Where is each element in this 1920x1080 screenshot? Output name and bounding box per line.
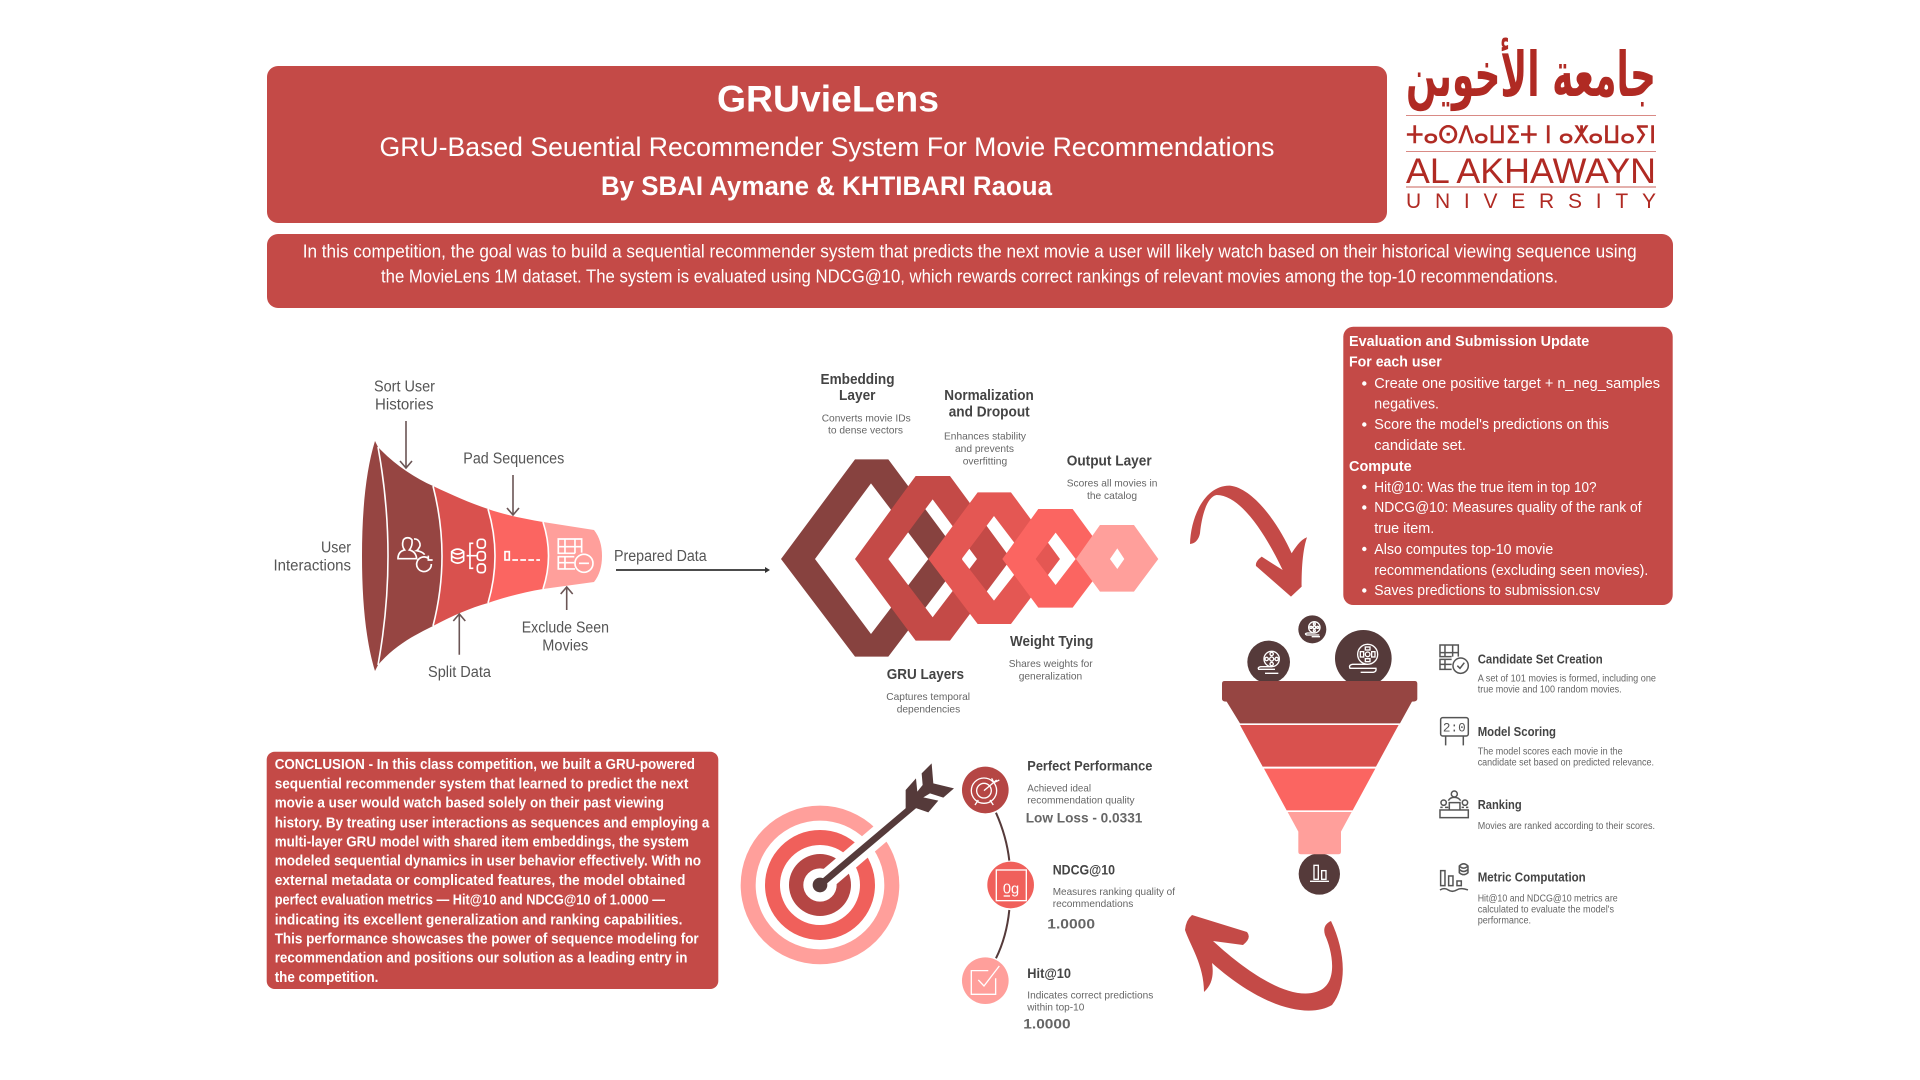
step: candidate set creation: Candidate Set Creation: [1478, 652, 1603, 666]
step: model scoring: Model Scoring: [1478, 725, 1556, 739]
text: normalization and dropout: Enhances stability: [944, 431, 1027, 443]
text: weight tying: generalization: [1019, 670, 1082, 682]
title banner: [267, 66, 1387, 223]
panel: evaluation and submission: Score the model's predictions on this: [1374, 417, 1609, 433]
label: pad sequences: [463, 450, 565, 515]
text: embedding layer: Embedding: [820, 372, 894, 388]
text: output layer: Output Layer: [1067, 454, 1152, 470]
description panel: In this competition, the goal was to build a sequential recommender system that predicts the next movie a user will likely watch based on their historical viewing sequence using: [303, 242, 1637, 262]
label: sort user histories: [374, 379, 435, 468]
panel: conclusion: movie a user would watch based solely on their past viewing: [275, 795, 664, 811]
panel: evaluation and submission: negatives.: [1374, 396, 1439, 412]
movie reels: [1247, 615, 1392, 687]
label: user interactions: [274, 539, 351, 574]
metric: perfect performance: Perfect Performance: [1027, 758, 1152, 774]
step: model scoring: The model scores each movie in the: [1478, 747, 1623, 758]
icon: NDCG badge: [987, 862, 1034, 908]
label: exclude seen movies: Movies: [542, 638, 589, 655]
weight tying ring: [1002, 509, 1109, 608]
arrow: prepared data: Prepared Data: [614, 548, 707, 565]
output circle: [1299, 853, 1340, 895]
step: metric computation: [1440, 864, 1618, 927]
icon: users refresh: [398, 538, 433, 572]
panel: evaluation and submission: Compute: [1349, 459, 1412, 475]
icon: bars: [1310, 865, 1329, 881]
panel: conclusion: This performance showcases the power of sequence modeling for: [275, 931, 699, 947]
metric: NDCG@10: Measures ranking quality of: [1053, 886, 1175, 898]
icon: podium: [1440, 791, 1468, 818]
panel: evaluation and submission: Saves predictions to submission.csv: [1374, 583, 1601, 599]
university logo: [1406, 37, 1656, 213]
evaluation funnel: [1222, 615, 1417, 895]
text: output layer: [1067, 454, 1158, 502]
arrow: curved back to metrics: [1185, 915, 1343, 1011]
label: sort user histories: Sort User: [374, 379, 435, 396]
metric: NDCG@10: NDCG@10: [1053, 861, 1115, 877]
stage 4: [1288, 812, 1352, 854]
label: split data: Split Data: [428, 664, 491, 681]
text: normalization and dropout: Normalization: [944, 388, 1034, 404]
step: candidate set creation: [1440, 645, 1656, 696]
text: normalization and dropout: and Dropout: [949, 405, 1030, 421]
description panel: the MovieLens 1M dataset. The system is evaluated using NDCG@10, which rewards correct rankings of relevant movies among the top-10 recommendations.: [381, 267, 1558, 287]
icon: scoreboard: [1441, 718, 1468, 745]
segment: second stage: [433, 486, 495, 626]
text: weight tying: Weight Tying: [1010, 634, 1093, 650]
segment: third stage: [488, 509, 548, 603]
text: embedding layer: Converts movie IDs: [822, 412, 911, 424]
dart: [820, 803, 917, 885]
step: candidate set creation: true movie and 100 random movies.: [1478, 685, 1622, 696]
text: output layer: the catalog: [1087, 490, 1137, 502]
text: normalization and dropout: overfitting: [963, 455, 1007, 467]
icon: NDCG badge: 0g: [1003, 881, 1019, 897]
metric: Hit@10: Indicates correct predictions: [1027, 990, 1153, 1002]
GRU architecture interlocking diamonds: [781, 459, 1158, 657]
text: output layer: Scores all movies in: [1067, 478, 1158, 490]
subtitle: GRU-Based Seuential Recommender System For Movie Recommendations: [380, 132, 1274, 162]
panel: evaluation and submission: Evaluation and Submission Update: [1349, 334, 1589, 350]
university logo: AL AKHAWAYN: [1406, 152, 1656, 191]
step: candidate set creation: A set of 101 movies is formed, including one: [1478, 674, 1656, 685]
panel: evaluation and submission: recommendations (excluding seen movies).: [1374, 563, 1648, 579]
segment: user interactions cap and first stage: [362, 441, 442, 671]
label: exclude seen movies: [522, 587, 609, 655]
segment: fourth stage: [543, 522, 602, 589]
label: user interactions: User: [321, 539, 351, 556]
icon: check badge: [962, 957, 1009, 1004]
panel: evaluation and submission: Also computes top-10 movie: [1374, 542, 1553, 558]
text: normalization and dropout: and prevents: [955, 443, 1014, 455]
text: embedding layer: Layer: [839, 388, 876, 404]
panel: evaluation and submission: Hit@10: Was the true item in top 10?: [1374, 480, 1597, 496]
arrow: curved down to funnel: [1190, 486, 1307, 597]
label: sort user histories: Histories: [375, 396, 434, 413]
panel: evaluation and submission: NDCG@10: Measures quality of the rank of: [1374, 500, 1643, 516]
text: GRU layers: [886, 667, 970, 715]
metric: Hit@10: [962, 957, 1153, 1031]
panel: conclusion: modeled sequential dynamics in user behavior effectively. With no: [275, 853, 701, 869]
label: exclude seen movies: Exclude Seen: [522, 620, 609, 637]
text: normalization and dropout: [944, 388, 1034, 467]
text: GRU layers: dependencies: [897, 703, 960, 715]
metric: NDCG@10: 1.0000: [1047, 915, 1095, 931]
text: embedding layer: [820, 372, 911, 437]
panel: conclusion: perfect evaluation metrics — Hit@10 and NDCG@10 of 1.0000 —: [275, 892, 665, 908]
panel: evaluation and submission: true item.: [1374, 521, 1434, 537]
text: GRU layers: Captures temporal: [886, 691, 970, 703]
text: weight tying: Shares weights for: [1009, 658, 1093, 670]
step: metric computation: performance.: [1478, 916, 1531, 927]
icon: film exclude: [558, 539, 593, 572]
panel: conclusion: CONCLUSION - In this class competition, we built a GRU-powered: [275, 757, 695, 773]
timeline connector: [996, 813, 1009, 958]
metric: perfect performance: recommendation quality: [1027, 795, 1135, 807]
step: ranking: Ranking: [1478, 798, 1522, 812]
output ring: [1076, 525, 1158, 592]
panel: evaluation and submission: For each user: [1349, 355, 1442, 371]
embedding layer ring: [781, 459, 962, 657]
panel: evaluation and submission: [1343, 327, 1673, 605]
panel: conclusion: the competition.: [275, 970, 378, 986]
label: split data: [428, 614, 491, 681]
university logo: UNIVERSITY: [1406, 190, 1656, 213]
target with dart: [741, 763, 954, 964]
panel: evaluation and submission: Create one positive target + n_neg_samples: [1374, 376, 1660, 392]
description panel: [267, 234, 1673, 308]
metric: NDCG@10: recommendations: [1053, 898, 1133, 910]
normalization ring: [928, 492, 1060, 624]
panel: conclusion: recommendation and positions our solution as a leading entry in: [275, 950, 687, 966]
step: metric computation: calculated to evaluate the model's: [1478, 905, 1614, 916]
authors: By SBAI Aymane & KHTIBARI Raoua: [601, 171, 1053, 201]
metric: Hit@10: Hit@10: [1027, 965, 1071, 981]
label: pad sequences: Pad Sequences: [463, 450, 565, 467]
university logo: جامعة الأخوين: [1406, 37, 1656, 111]
step: model scoring: [1441, 718, 1654, 769]
step: ranking: Movies are ranked according to their scores.: [1478, 821, 1655, 832]
panel: conclusion: indicating its excellent generalization and ranking capabilities.: [275, 912, 682, 928]
metric: perfect performance: [962, 758, 1152, 826]
metric: NDCG@10: [987, 861, 1175, 931]
GRU layers ring: [855, 476, 1011, 641]
icon: target badge: [962, 767, 1009, 813]
icon: padding: [505, 552, 540, 560]
stage 3: [1264, 769, 1375, 810]
panel: conclusion: history. By treating user interactions as sequences and employing a: [275, 815, 710, 831]
arrow: prepared data: [614, 548, 770, 573]
metric: perfect performance: Low Loss - 0.0331: [1026, 810, 1143, 826]
university logo: ⵜⴰⵙⴷⴰⵡⵉⵜ ⵏ ⴰⵅⴰⵡⴰⵢⵏ: [1406, 121, 1656, 149]
metric: perfect performance: Achieved ideal: [1027, 783, 1091, 795]
panel: conclusion: sequential recommender system that learned to predict the next: [275, 776, 689, 792]
step: metric computation: Hit@10 and NDCG@10 metrics are: [1478, 894, 1618, 905]
title: GRUvieLens: [717, 78, 939, 120]
panel: evaluation and submission: candidate set.: [1374, 438, 1466, 454]
stage 2: [1240, 725, 1399, 767]
panel: conclusion: external metadata or complicated features, the model obtained: [275, 873, 685, 889]
data preparation funnel: [362, 441, 602, 671]
icon: database split: [452, 539, 485, 573]
icon: film check: [1440, 645, 1468, 673]
icon: bars and database: [1440, 864, 1468, 891]
icon: scoreboard: 2:0: [1443, 721, 1466, 736]
text: weight tying: [1009, 634, 1093, 682]
metric: Hit@10: 1.0000: [1023, 1015, 1071, 1031]
funnel lid and stage 1: [1222, 681, 1417, 723]
label: user interactions: Interactions: [274, 557, 351, 574]
step: metric computation: Metric Computation: [1478, 871, 1586, 885]
panel: conclusion: multi-layer GRU model with shared item embeddings, the system: [275, 834, 689, 850]
metric: Hit@10: within top-10: [1026, 1002, 1084, 1014]
panel: conclusion: [267, 752, 718, 989]
text: embedding layer: to dense vectors: [828, 425, 903, 437]
text: GRU layers: GRU Layers: [887, 667, 964, 683]
step: model scoring: candidate set based on predicted relevance.: [1478, 758, 1654, 769]
step: ranking: [1440, 791, 1655, 832]
